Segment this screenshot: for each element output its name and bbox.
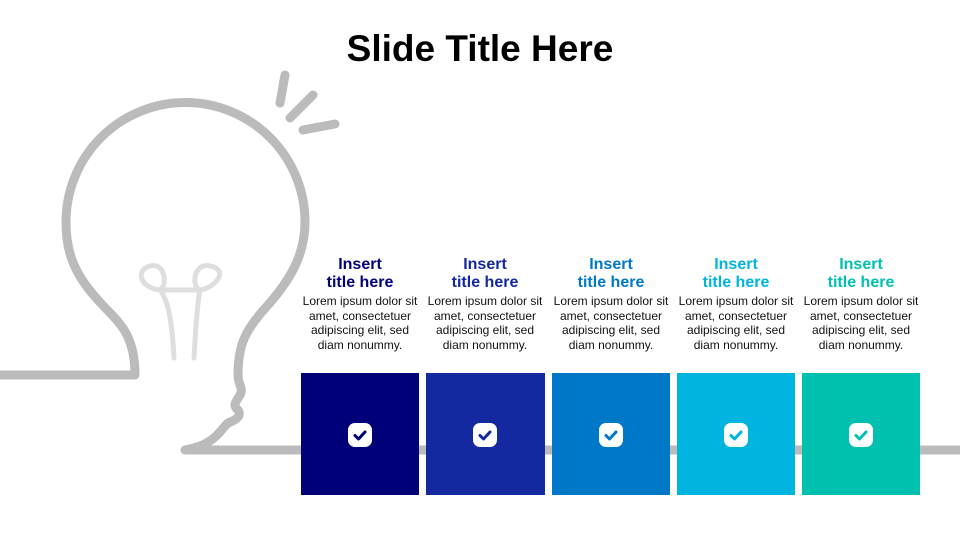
column 3 text <box>554 256 668 352</box>
column 5 text: Lorem ipsum dolor sit amet, consectetuer adipiscing elit, sed diam nonummy. <box>804 294 918 352</box>
column 5 text <box>804 256 918 352</box>
column 2 text: Insert <box>463 256 507 273</box>
box 5 <box>802 373 920 495</box>
column 5 text: title here <box>828 274 894 291</box>
column 4 text: Lorem ipsum dolor sit amet, consectetuer adipiscing elit, sed diam nonummy. <box>679 294 793 352</box>
column 3 text: title here <box>578 274 644 291</box>
column 2 text: Lorem ipsum dolor sit amet, consectetuer adipiscing elit, sed diam nonummy. <box>428 294 542 352</box>
column 1 text: Insert <box>338 256 382 273</box>
icon: check <box>599 423 623 447</box>
column 4 text: title here <box>703 274 769 291</box>
icon: check <box>473 423 497 447</box>
icon: check <box>724 423 748 447</box>
box 3 <box>552 373 670 495</box>
box 1 <box>301 373 419 495</box>
column 4 text <box>679 256 794 352</box>
title: Slide Title Here <box>347 28 613 69</box>
column 1 text <box>303 256 418 352</box>
column 3 text: Lorem ipsum dolor sit amet, consectetuer adipiscing elit, sed diam nonummy. <box>554 294 668 352</box>
column 4 text: Insert <box>714 256 758 273</box>
column 1 text: Lorem ipsum dolor sit amet, consectetuer adipiscing elit, sed diam nonummy. <box>303 294 417 352</box>
column 2 text: title here <box>452 274 518 291</box>
icon: check <box>348 423 372 447</box>
box 2 <box>426 373 545 495</box>
column 5 text: Insert <box>839 256 883 273</box>
column 2 text <box>428 256 542 352</box>
icon: check <box>849 423 873 447</box>
column 3 text: Insert <box>589 256 633 273</box>
box 4 <box>677 373 795 495</box>
column 1 text: title here <box>327 274 393 291</box>
